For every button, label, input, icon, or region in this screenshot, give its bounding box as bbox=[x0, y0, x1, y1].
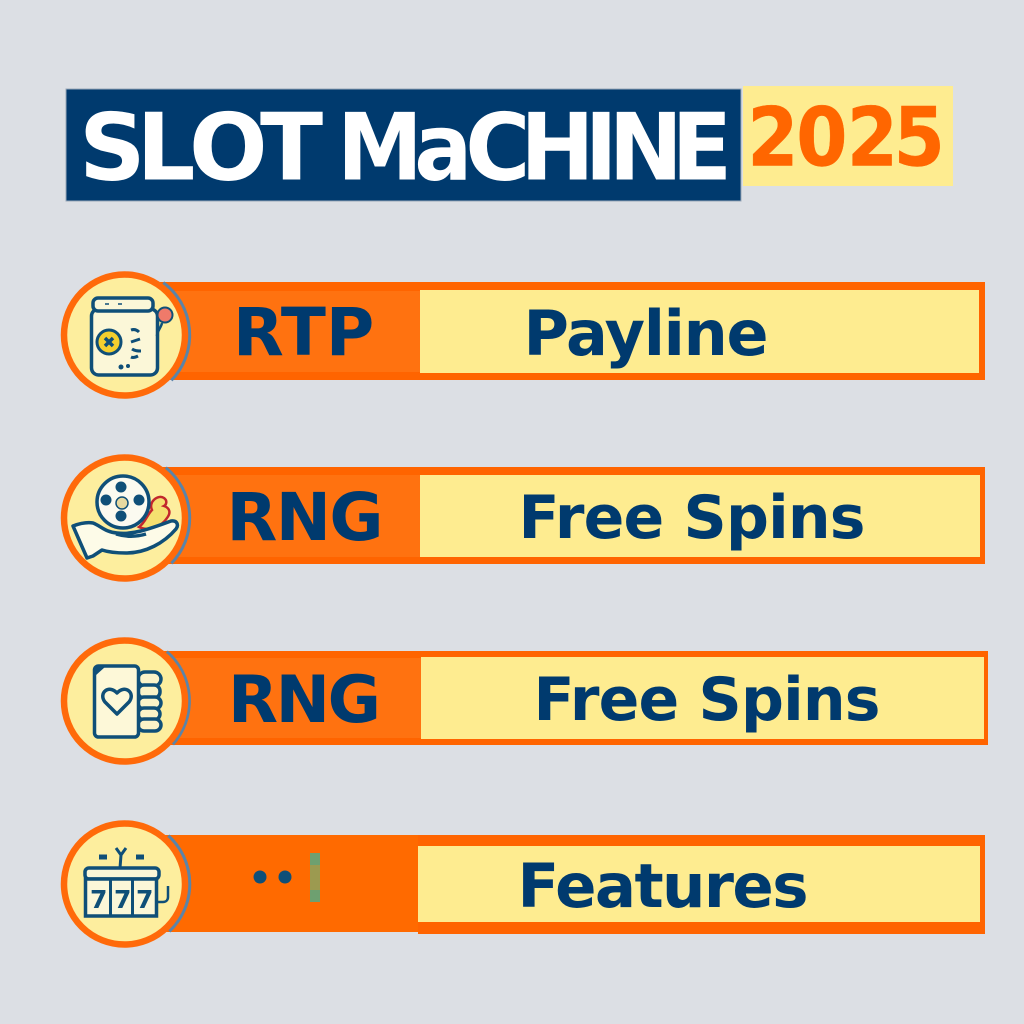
row 2 label: RNG bbox=[226, 479, 384, 556]
title text bbox=[79, 94, 732, 202]
year text: 2025 bbox=[747, 91, 945, 185]
title text: Ma bbox=[337, 95, 472, 202]
row 1 bar bbox=[160, 282, 985, 380]
row 3 value: Free Spins bbox=[534, 665, 880, 735]
icon: 777 slot machine: 7 bbox=[136, 885, 153, 914]
icon: 777 slot machine: 7 bbox=[114, 885, 131, 914]
row 3 label: RNG bbox=[228, 663, 381, 738]
row 4 bar bbox=[160, 835, 985, 934]
row 1 value: Payline bbox=[524, 297, 768, 370]
row 1 bbox=[64, 274, 985, 396]
icon: heart card in hand bbox=[64, 640, 189, 762]
row 4 label marks bbox=[254, 853, 320, 902]
icon: 777 slot machine bbox=[64, 824, 189, 944]
row 2 bbox=[64, 458, 985, 578]
year badge bbox=[743, 86, 953, 186]
title text: CHINE bbox=[465, 95, 732, 202]
title banner bbox=[66, 89, 741, 202]
row 3 bbox=[64, 640, 988, 762]
row 4 bbox=[64, 824, 985, 944]
row 3 bar bbox=[160, 651, 988, 745]
row 1 label: RTP bbox=[233, 294, 374, 371]
icon: reel in hand bbox=[64, 458, 189, 578]
icon: 777 slot machine: 7 bbox=[90, 885, 107, 914]
row 2 bar bbox=[160, 467, 985, 564]
row 4 value: Features bbox=[518, 851, 808, 922]
title text: SLOT bbox=[79, 94, 323, 202]
row 2 value: Free Spins bbox=[518, 483, 866, 553]
icon: slot cabinet bbox=[64, 274, 189, 396]
